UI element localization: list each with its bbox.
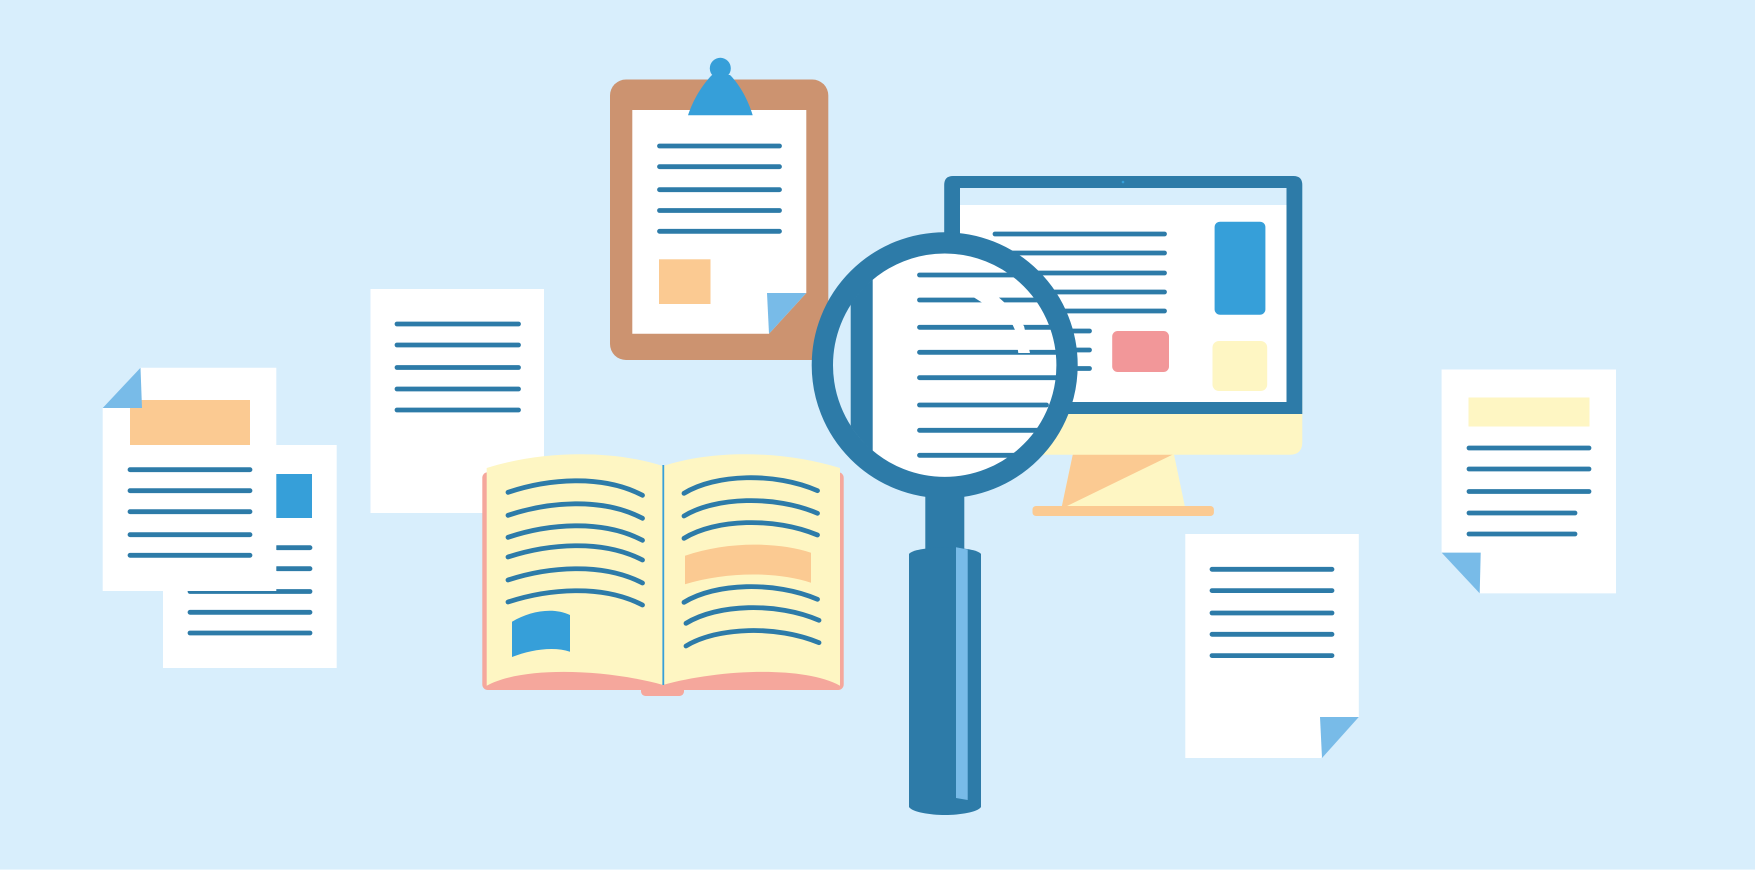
lens ring	[822, 243, 1067, 488]
orange image block	[130, 400, 250, 445]
document: bottom right sheet	[1185, 534, 1359, 758]
open book	[482, 454, 844, 696]
magnifying glass	[822, 243, 1070, 815]
lens white distortion	[973, 297, 1030, 353]
left page text lines	[508, 481, 642, 605]
orange image block	[659, 259, 710, 304]
document: far right sheet	[1442, 370, 1616, 593]
page fold	[103, 368, 142, 408]
text lines	[660, 146, 780, 231]
clipboard	[610, 58, 828, 360]
clip	[688, 58, 753, 115]
monitor screen	[960, 188, 1286, 402]
book cover	[641, 680, 684, 696]
yellow tile	[1212, 341, 1267, 391]
document: top middle sheet	[370, 289, 544, 513]
document: front sheet, left pair	[103, 368, 276, 591]
page fold	[767, 293, 806, 334]
pink tile	[1112, 331, 1169, 372]
blue tile	[1215, 222, 1265, 315]
handle highlight	[956, 547, 968, 800]
left page blue picture	[512, 611, 570, 657]
document: back sheet, left pair	[163, 445, 337, 668]
spine line	[662, 465, 664, 685]
monitor	[940, 176, 1302, 516]
handle grip	[909, 547, 981, 815]
clipboard paper	[632, 110, 806, 334]
right page orange band	[685, 545, 811, 584]
screen text lines	[940, 234, 1164, 368]
lens contents	[850, 254, 1056, 477]
monitor bezel	[944, 176, 1302, 414]
right page	[663, 454, 840, 686]
text lines	[130, 470, 250, 555]
monitor stand	[1062, 454, 1185, 507]
right page text lines	[684, 478, 819, 646]
handle neck	[925, 490, 964, 555]
monitor chin	[944, 400, 1302, 455]
left page	[487, 454, 663, 686]
